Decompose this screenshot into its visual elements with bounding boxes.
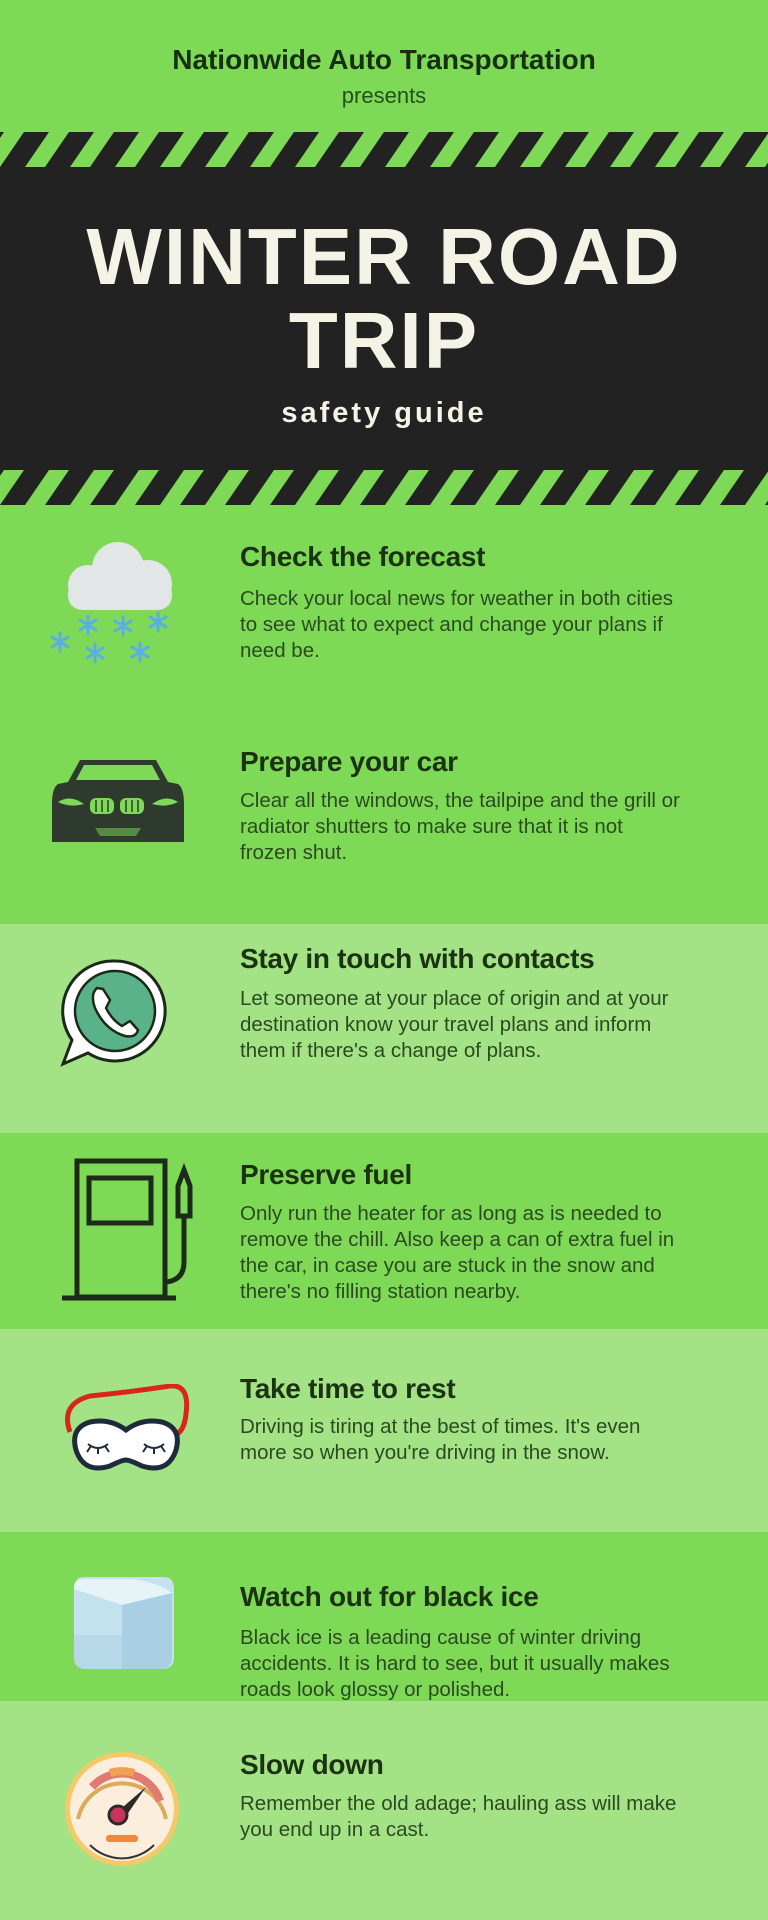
text: contacts: destination know your travel plans and inform	[240, 1013, 651, 1036]
text: contacts: them if there's a change of plans.	[240, 1039, 541, 1062]
text: rest: more so when you're driving in the snow.	[240, 1441, 610, 1464]
text: black ice: accidents. It is hard to see, but it usually makes	[240, 1652, 670, 1675]
heading: stay in touch: Stay in touch with contacts	[240, 943, 594, 974]
text: rest: Driving is tiring at the best of times. It's even	[240, 1415, 640, 1438]
heading: slow down: Slow down	[240, 1749, 384, 1780]
text: forecast: Check your local news for weather in both cities	[240, 587, 673, 610]
text: forecast: to see what to expect and change your plans if	[240, 613, 663, 636]
text: black ice: roads look glossy or polished.	[240, 1678, 510, 1701]
text: car: Clear all the windows, the tailpipe and the grill or	[240, 789, 680, 812]
subtitle: safety guide	[281, 397, 487, 429]
text: car	[240, 789, 680, 864]
icon: car	[52, 760, 184, 842]
text: fuel	[240, 1202, 674, 1303]
icon: speedometer	[65, 1752, 179, 1866]
icon: ice cube	[74, 1577, 174, 1669]
text: slow down: you end up in a cast.	[240, 1818, 429, 1841]
main title	[86, 212, 682, 385]
text: fuel: the car, in case you are stuck in the snow and	[240, 1254, 655, 1277]
text: fuel: remove the chill. Also keep a can of extra fuel in	[240, 1228, 674, 1251]
text: slow down: Remember the old adage; hauling ass will make	[240, 1792, 676, 1815]
text: fuel: Only run the heater for as long as is needed to	[240, 1202, 662, 1225]
heading: prepare your car: Prepare your car	[240, 746, 458, 777]
text: forecast	[240, 587, 673, 662]
icon: sleep mask	[65, 1384, 190, 1470]
text: fuel: there's no filling station nearby.	[240, 1280, 520, 1303]
text: black ice	[240, 1626, 670, 1701]
text: forecast: need be.	[240, 639, 320, 662]
presents: presents	[342, 83, 426, 108]
icon: snow cloud	[50, 542, 172, 664]
heading: preserve fuel: Preserve fuel	[240, 1159, 412, 1190]
text: contacts	[240, 987, 668, 1062]
text: car: radiator shutters to make sure that it is not	[240, 815, 623, 838]
text: rest	[240, 1415, 640, 1464]
icon: whatsapp	[60, 960, 167, 1067]
header banner	[0, 132, 768, 505]
icon: fuel pump	[62, 1158, 192, 1300]
presenter title: Nationwide Auto Transportation	[172, 44, 596, 75]
text: contacts: Let someone at your place of origin and at your	[240, 987, 668, 1010]
main title: TRIP	[289, 296, 479, 385]
text: slow down	[240, 1792, 676, 1841]
heading: check the forecast: Check the forecast	[240, 541, 485, 572]
heading: take time to rest: Take time to rest	[240, 1373, 455, 1404]
text: car: frozen shut.	[240, 841, 347, 864]
main title: WINTER ROAD	[86, 212, 682, 301]
text: black ice: Black ice is a leading cause of winter driving	[240, 1626, 641, 1649]
heading: black ice: Watch out for black ice	[240, 1581, 539, 1612]
